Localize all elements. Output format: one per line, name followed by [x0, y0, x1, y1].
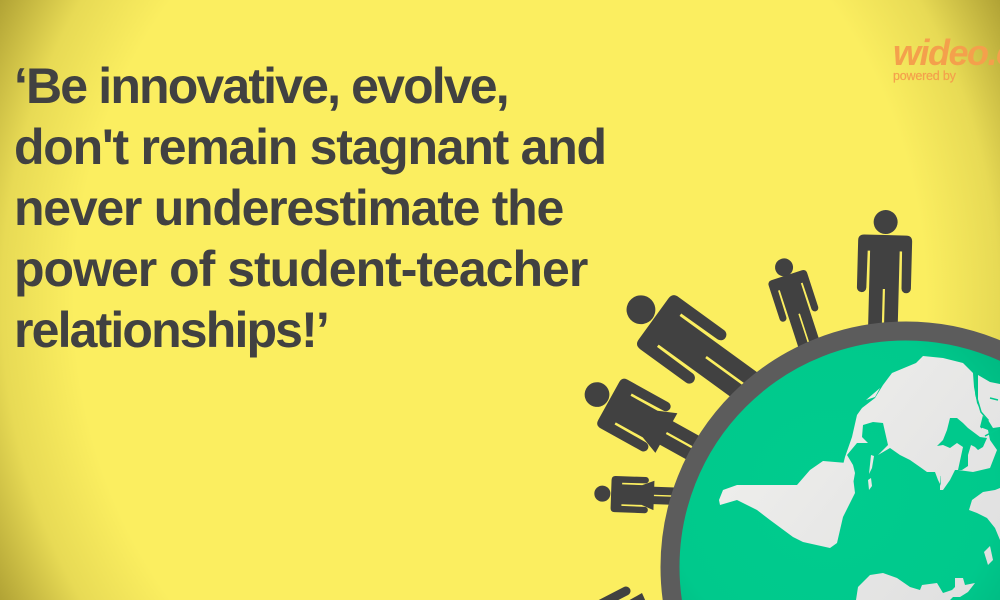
inner strait detail	[975, 392, 998, 437]
tip of peninsula	[940, 470, 955, 490]
person: large man	[610, 275, 776, 420]
person: tall man on top	[856, 209, 913, 342]
island: narrow west coast top	[869, 455, 874, 474]
quote text: relationships!’	[14, 302, 328, 358]
person: small woman	[594, 475, 683, 514]
person: partly visible woman at bottom	[595, 591, 646, 600]
island: narrow west coast bottom	[868, 478, 872, 490]
quote text: never underestimate the	[14, 180, 563, 236]
continent: southern mass	[856, 573, 975, 600]
globe	[670, 331, 1000, 600]
logo: wideo watermark: powered by	[893, 69, 956, 83]
quote text: ‘Be innovative, evolve,	[14, 58, 508, 114]
globe ring	[670, 331, 1000, 600]
quote text: power of student-teacher	[14, 241, 587, 297]
person: partly visible figure at right edge	[997, 344, 1000, 354]
continent: left tail	[719, 461, 855, 548]
continent: large northern landmass	[844, 356, 997, 490]
quote text: don't remain stagnant and	[14, 119, 606, 175]
illustration: people standing on globe	[584, 210, 1000, 600]
islands: north east	[978, 375, 1000, 428]
person: woman	[573, 364, 718, 478]
continents	[719, 356, 1000, 600]
person: small man	[762, 253, 830, 357]
sliver island	[866, 388, 880, 400]
quote text	[14, 58, 606, 358]
island: east	[984, 546, 993, 565]
continent: eastern mass	[969, 488, 1000, 540]
inland sea	[937, 418, 987, 470]
